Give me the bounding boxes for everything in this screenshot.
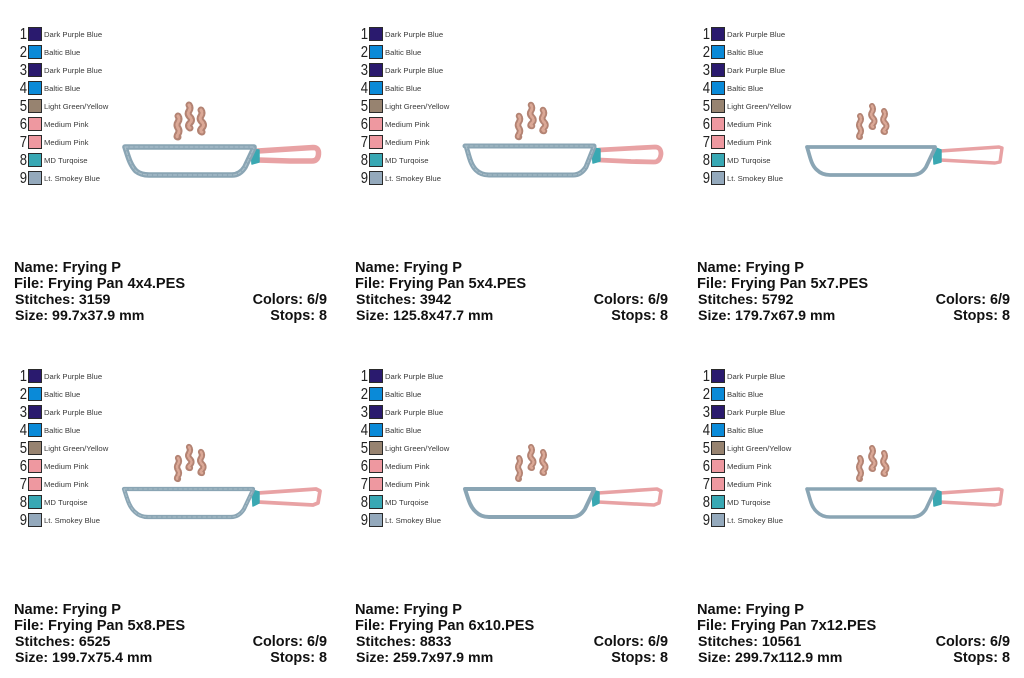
- color row 9: [0, 511, 120, 529]
- design details: Stops: 8: [611, 308, 668, 324]
- design details: Colors: 6/9: [594, 634, 668, 650]
- color row 8: MD Turqoise: [385, 498, 429, 507]
- color row 1: 1: [361, 26, 368, 43]
- design details: Stitches: 6525: [15, 634, 110, 650]
- color row 5: [683, 439, 803, 457]
- color row 5: 5: [703, 440, 710, 457]
- color row 2: Baltic Blue: [385, 390, 421, 399]
- color row 9: 9: [361, 170, 368, 187]
- color row 4: 4: [703, 422, 710, 439]
- color row 8: MD Turqoise: [44, 156, 88, 165]
- color row 8: MD Turqoise: [727, 498, 771, 507]
- color row 7: [683, 475, 803, 493]
- color row 6: Medium Pink: [385, 462, 429, 471]
- color row 9: [20, 170, 100, 187]
- color row 8: 8: [703, 152, 710, 169]
- color legend: [683, 367, 803, 531]
- color row 7: Medium Pink: [727, 480, 771, 489]
- color row 4: [703, 80, 763, 97]
- color row 7: Medium Pink: [44, 480, 88, 489]
- color row 9: 9: [703, 512, 710, 529]
- color row 2: 2: [703, 386, 710, 403]
- color row 4: [341, 421, 461, 439]
- color row 5: 5: [20, 440, 27, 457]
- design details: File: Frying Pan 7x12.PES: [697, 618, 876, 634]
- color row 4: Baltic Blue: [385, 84, 421, 93]
- color row 3: [20, 62, 102, 79]
- color row 4: Baltic Blue: [385, 426, 421, 435]
- color row 6: [341, 457, 461, 475]
- design details: File: Frying Pan 5x8.PES: [14, 618, 185, 634]
- color row 3: 3: [20, 62, 27, 79]
- design details: Stops: 8: [270, 650, 327, 666]
- color row 7: 7: [361, 134, 368, 151]
- color row 6: 6: [703, 116, 710, 133]
- icon: frying pan with food: [798, 437, 1013, 527]
- color row 7: [0, 475, 120, 493]
- color row 3: [341, 403, 461, 421]
- color row 5: Light Green/Yellow: [44, 444, 108, 453]
- color row 4: 4: [361, 422, 368, 439]
- color row 2: Baltic Blue: [727, 48, 763, 57]
- design details: Name: Frying P: [697, 260, 804, 276]
- color row 1: [0, 367, 120, 385]
- design details: [683, 602, 1024, 668]
- color row 5: [361, 98, 450, 115]
- icon: frying pan with food: [115, 437, 330, 527]
- panel: Frying Pan 7x12: [683, 342, 1024, 678]
- color row 6: 6: [703, 458, 710, 475]
- color row 9: 9: [20, 170, 27, 187]
- color row 9: Lt. Smokey Blue: [44, 174, 100, 183]
- color row 5: [20, 98, 108, 115]
- design details: Stops: 8: [611, 650, 668, 666]
- color row 3: Dark Purple Blue: [727, 66, 785, 75]
- color row 4: [361, 80, 421, 97]
- color row 2: Baltic Blue: [44, 48, 80, 57]
- color row 9: Lt. Smokey Blue: [385, 174, 441, 183]
- color row 2: [341, 385, 461, 403]
- design details: Colors: 6/9: [936, 292, 1010, 308]
- color row 1: 1: [20, 26, 27, 43]
- design details: Stops: 8: [953, 650, 1010, 666]
- color row 6: Medium Pink: [727, 462, 771, 471]
- color row 8: MD Turqoise: [44, 498, 88, 507]
- color row 7: 7: [703, 134, 710, 151]
- color row 3: [703, 62, 785, 79]
- color row 7: Medium Pink: [385, 480, 429, 489]
- design details: Name: Frying P: [697, 602, 804, 618]
- color row 1: [361, 26, 443, 43]
- color row 4: [20, 80, 80, 97]
- color row 7: [361, 134, 430, 151]
- color row 3: 3: [20, 404, 27, 421]
- design details: Size: 199.7x75.4 mm: [15, 650, 152, 666]
- color row 9: Lt. Smokey Blue: [727, 516, 783, 525]
- color row 2: [683, 385, 803, 403]
- design details: Stitches: 3942: [356, 292, 451, 308]
- design details: [341, 602, 682, 668]
- color row 6: [0, 457, 120, 475]
- design details: Size: 99.7x37.9 mm: [15, 308, 144, 324]
- color row 1: Dark Purple Blue: [385, 372, 443, 381]
- design details: [355, 260, 668, 324]
- color row 2: Baltic Blue: [385, 48, 421, 57]
- design details: Name: Frying P: [355, 260, 462, 276]
- color row 5: Light Green/Yellow: [727, 444, 791, 453]
- design details: Colors: 6/9: [594, 292, 668, 308]
- design details: Size: 179.7x67.9 mm: [698, 308, 835, 324]
- color row 7: Medium Pink: [385, 138, 429, 147]
- color row 8: [361, 152, 429, 169]
- design details: [697, 260, 1010, 324]
- color row 8: MD Turqoise: [727, 156, 771, 165]
- color row 6: Medium Pink: [44, 462, 88, 471]
- color row 2: Baltic Blue: [727, 390, 763, 399]
- design details: Name: Frying P: [355, 602, 462, 618]
- design details: [14, 260, 327, 324]
- design details: File: Frying Pan 5x7.PES: [697, 276, 868, 292]
- icon: frying pan with food: [805, 103, 1004, 177]
- color row 2: 2: [20, 44, 27, 61]
- color row 4: 4: [20, 422, 27, 439]
- panel: Frying Pan 6x10: [341, 342, 682, 678]
- color row 7: [703, 134, 772, 151]
- color row 2: 2: [703, 44, 710, 61]
- color legend: [703, 26, 792, 187]
- color row 5: [0, 439, 120, 457]
- color row 7: 7: [361, 476, 368, 493]
- design details: [0, 602, 341, 668]
- color row 5: 5: [361, 98, 368, 115]
- color row 1: [703, 26, 785, 43]
- design details: Colors: 6/9: [253, 292, 327, 308]
- color row 6: 6: [361, 116, 368, 133]
- color row 5: 5: [703, 98, 710, 115]
- color row 6: Medium Pink: [385, 120, 429, 129]
- color legend: [20, 26, 108, 187]
- color row 9: Lt. Smokey Blue: [385, 516, 441, 525]
- icon: frying pan with food: [456, 437, 671, 527]
- design details: Colors: 6/9: [253, 634, 327, 650]
- color row 7: [341, 475, 461, 493]
- color row 9: [361, 170, 441, 187]
- design details: Stitches: 8833: [356, 634, 451, 650]
- color row 4: 4: [20, 80, 27, 97]
- color row 9: 9: [361, 512, 368, 529]
- color row 9: 9: [703, 170, 710, 187]
- color row 1: Dark Purple Blue: [727, 30, 785, 39]
- color row 4: Baltic Blue: [727, 84, 763, 93]
- color row 4: [683, 421, 803, 439]
- color row 6: 6: [20, 458, 27, 475]
- color row 8: 8: [361, 152, 368, 169]
- design details: Name: Frying P: [14, 260, 121, 276]
- color row 2: [20, 44, 80, 61]
- color row 5: Light Green/Yellow: [727, 102, 791, 111]
- design details: Size: 299.7x112.9 mm: [698, 650, 842, 666]
- color legend: [361, 26, 450, 187]
- color row 3: 3: [703, 404, 710, 421]
- color row 6: [361, 116, 430, 133]
- color row 2: 2: [361, 44, 368, 61]
- color legend: [341, 367, 461, 531]
- color row 1: [20, 26, 102, 43]
- design details: Stitches: 10561: [698, 634, 801, 650]
- color row 1: Dark Purple Blue: [44, 372, 102, 381]
- color row 1: [683, 367, 803, 385]
- color row 3: [683, 403, 803, 421]
- color row 3: Dark Purple Blue: [385, 66, 443, 75]
- color row 5: 5: [20, 98, 27, 115]
- color row 8: [0, 493, 120, 511]
- color row 1: 1: [361, 368, 368, 385]
- design details: Stops: 8: [953, 308, 1010, 324]
- color row 5: [703, 98, 792, 115]
- color row 7: [20, 134, 88, 151]
- color row 9: 9: [20, 512, 27, 529]
- color row 2: [361, 44, 421, 61]
- design details: Stitches: 3159: [15, 292, 110, 308]
- color row 4: 4: [361, 80, 368, 97]
- color row 7: Medium Pink: [727, 138, 771, 147]
- color legend: [0, 367, 120, 531]
- color row 2: Baltic Blue: [44, 390, 80, 399]
- color row 1: Dark Purple Blue: [385, 30, 443, 39]
- design details: Stops: 8: [270, 308, 327, 324]
- color row 8: 8: [361, 494, 368, 511]
- panel: Frying Pan 5x4: [355, 26, 668, 324]
- color row 1: [341, 367, 461, 385]
- design details: Name: Frying P: [14, 602, 121, 618]
- color row 3: 3: [361, 404, 368, 421]
- color row 4: 4: [703, 80, 710, 97]
- color row 1: 1: [703, 26, 710, 43]
- color row 4: Baltic Blue: [727, 426, 763, 435]
- color row 6: [683, 457, 803, 475]
- design details: Size: 259.7x97.9 mm: [356, 650, 493, 666]
- color row 6: 6: [20, 116, 27, 133]
- color row 6: 6: [361, 458, 368, 475]
- color row 8: 8: [20, 152, 27, 169]
- color row 3: Dark Purple Blue: [44, 66, 102, 75]
- color row 4: Baltic Blue: [44, 426, 80, 435]
- color row 1: 1: [703, 368, 710, 385]
- color row 7: 7: [20, 134, 27, 151]
- color row 8: [683, 493, 803, 511]
- design details: File: Frying Pan 6x10.PES: [355, 618, 534, 634]
- color row 1: Dark Purple Blue: [727, 372, 785, 381]
- color row 5: 5: [361, 440, 368, 457]
- color row 7: Medium Pink: [44, 138, 88, 147]
- panel: Frying Pan 4x4: [14, 26, 327, 324]
- color row 8: MD Turqoise: [385, 156, 429, 165]
- color row 8: [341, 493, 461, 511]
- design details: File: Frying Pan 5x4.PES: [355, 276, 526, 292]
- color row 9: [683, 511, 803, 529]
- color row 9: Lt. Smokey Blue: [727, 174, 783, 183]
- design details: Stitches: 5792: [698, 292, 793, 308]
- color row 3: Dark Purple Blue: [44, 408, 102, 417]
- color row 6: [20, 116, 88, 133]
- color row 1: Dark Purple Blue: [44, 30, 102, 39]
- design details: File: Frying Pan 4x4.PES: [14, 276, 185, 292]
- color row 6: Medium Pink: [44, 120, 88, 129]
- color row 8: 8: [20, 494, 27, 511]
- color row 4: [0, 421, 120, 439]
- color row 5: Light Green/Yellow: [44, 102, 108, 111]
- color row 4: Baltic Blue: [44, 84, 80, 93]
- color row 2: [0, 385, 120, 403]
- design details: Colors: 6/9: [936, 634, 1010, 650]
- color row 3: [0, 403, 120, 421]
- icon: frying pan with food: [462, 102, 664, 178]
- color row 9: Lt. Smokey Blue: [44, 516, 100, 525]
- color row 6: [703, 116, 772, 133]
- color row 3: [361, 62, 443, 79]
- color row 3: Dark Purple Blue: [385, 408, 443, 417]
- color row 1: 1: [20, 368, 27, 385]
- color row 8: [703, 152, 771, 169]
- color row 9: [703, 170, 783, 187]
- color row 7: 7: [703, 476, 710, 493]
- color row 5: Light Green/Yellow: [385, 102, 449, 111]
- color row 9: [341, 511, 461, 529]
- color row 5: [341, 439, 461, 457]
- panel: Frying Pan 5x8: [14, 368, 327, 666]
- design details: Size: 125.8x47.7 mm: [356, 308, 493, 324]
- color row 8: 8: [703, 494, 710, 511]
- color row 2: 2: [361, 386, 368, 403]
- color row 7: 7: [20, 476, 27, 493]
- color row 8: [20, 152, 88, 169]
- color row 3: Dark Purple Blue: [727, 408, 785, 417]
- color row 6: Medium Pink: [727, 120, 771, 129]
- color row 2: 2: [20, 386, 27, 403]
- color row 5: Light Green/Yellow: [385, 444, 449, 453]
- icon: frying pan with food: [122, 102, 322, 178]
- panel: Frying Pan 5x7: [697, 26, 1010, 324]
- color row 2: [703, 44, 763, 61]
- color row 3: 3: [361, 62, 368, 79]
- color row 3: 3: [703, 62, 710, 79]
